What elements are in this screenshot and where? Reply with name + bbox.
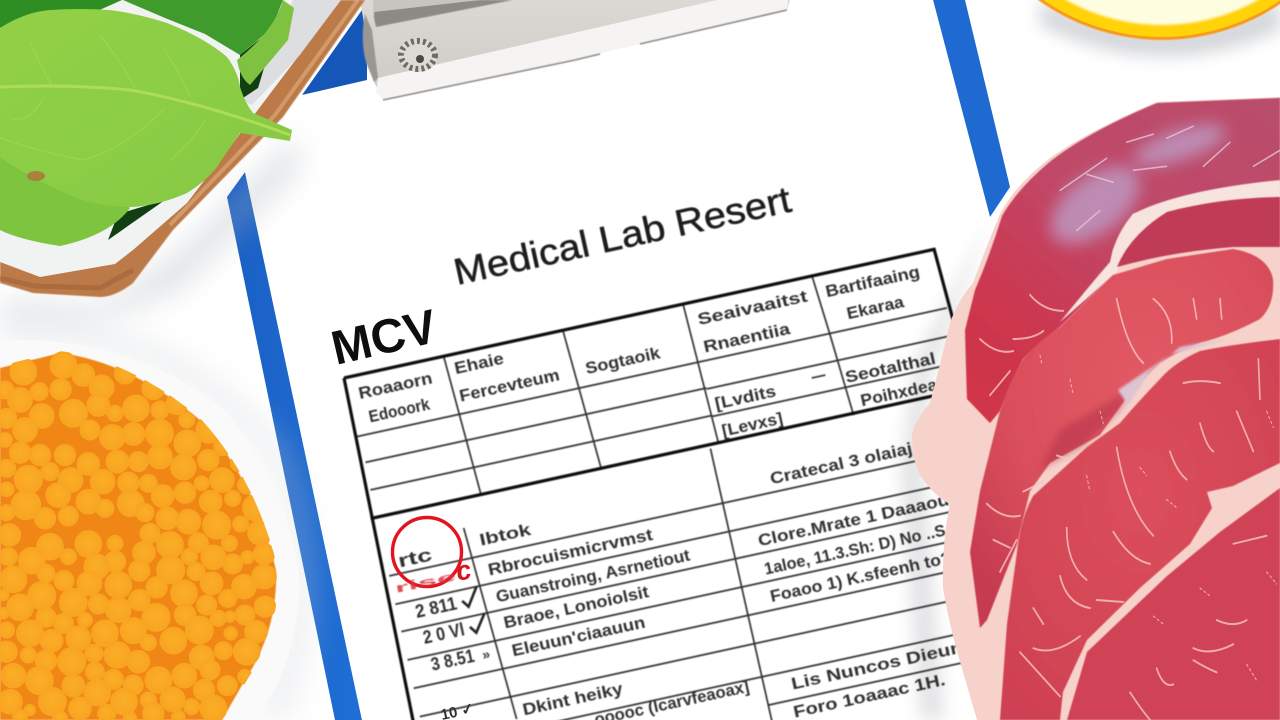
table header text: Fercevteum [458, 365, 561, 406]
right column results text: 1aloe, 11.3.Sh: D) No ..S [762, 521, 947, 579]
red circle annotation: c [453, 554, 474, 587]
result values column: 2 811 [413, 593, 459, 622]
table header text: Seaivaaitst [696, 287, 810, 329]
shadow under leaves [108, 25, 277, 240]
paper sheet [245, 0, 1010, 720]
red circle annotation [392, 518, 474, 596]
result values column: rtc [396, 545, 434, 571]
spinach leaf: light edge [237, 0, 294, 85]
table header text: Roaaorn [357, 368, 434, 403]
title: Medical Lab Resert: Medical Lab Resert [450, 179, 795, 293]
shaded meat fold [1040, 390, 1130, 470]
table header text: [Levxs] [720, 409, 785, 440]
lentils bowl [0, 351, 277, 720]
spinach leaf: dark back left [0, 0, 122, 28]
test names column [478, 482, 751, 720]
right column results text: Lis Nuncos Dieun [789, 638, 965, 693]
marbling streaks [980, 126, 1280, 720]
result values column: 3 8.51 [429, 646, 476, 675]
metal clip [360, 0, 790, 100]
tray wooden rim [0, 0, 365, 297]
test names column: Dkint heiky [521, 679, 625, 719]
raw meat [912, 97, 1280, 720]
table grid [338, 248, 1033, 720]
result values column: 2 0 Vl [421, 619, 466, 648]
test names column: Rbrocuismicrvmst [486, 525, 655, 579]
spinach leaf: dark back right [123, 0, 283, 55]
fat band top [1060, 180, 1280, 322]
right column results text: Cratecal 3 olaiaj [768, 439, 914, 488]
table header text: — [809, 365, 827, 386]
leaf midrib and veins [0, 35, 290, 160]
table header text: Ehaie [453, 349, 505, 378]
lilac fat fold [1118, 338, 1230, 405]
clip rivet [398, 38, 438, 72]
table header text: Seotalthal [843, 349, 937, 387]
right column results text: Foaoo 1) K.sfeenh to? [768, 548, 953, 606]
clipboard board: blue top corner [302, 3, 367, 95]
table header text: Sogtaoik [584, 343, 662, 378]
table header text: Edooork [367, 395, 432, 426]
test names column: Braoe, Lonoiolsit [502, 582, 651, 632]
leaf brown spot [27, 171, 45, 181]
lab results table [338, 248, 1033, 720]
test names column: Guanstroing, Asrnetiout [494, 546, 692, 606]
table header text: [Lvdits [713, 382, 778, 413]
lower large meat slice [1000, 339, 1280, 720]
spinach tray [0, 0, 365, 297]
right column results text: Clore.Mrate 1 Daaaou [756, 490, 951, 550]
table header text: Poihxdea [859, 375, 940, 410]
red circle annotation: rise [394, 568, 457, 596]
table header text: Ekaraa [845, 292, 906, 323]
clipboard [227, 0, 1010, 720]
spinach leaf: main [0, 9, 292, 207]
bowl rim [0, 340, 300, 720]
orange slice [950, 0, 1280, 40]
bottom right meat slice [1067, 488, 1280, 720]
upper meat slice [965, 98, 1280, 423]
result values column [396, 536, 495, 677]
heading: MCV: MCV [327, 300, 442, 376]
result values column: » [480, 645, 492, 663]
middle meat slice [970, 249, 1273, 628]
test names column: Ibtok [478, 520, 533, 550]
tray white interior [0, 0, 341, 277]
table header text: Rnaentiia [702, 319, 792, 356]
spinach leaf: lower [0, 130, 130, 246]
right column results text [742, 434, 988, 720]
meat outline and fat [912, 97, 1280, 720]
lilac sheen [1037, 116, 1230, 259]
table header text [356, 258, 946, 514]
lentil grains [0, 352, 276, 720]
lentils base [0, 353, 276, 720]
clipboard board: right edge [933, 0, 1010, 217]
table header text: Bartifaaing [824, 262, 922, 301]
clipboard board: left edge [227, 172, 362, 720]
dark meat strip [1117, 197, 1280, 267]
test names column: Eleuun'ciaauun [510, 613, 647, 660]
